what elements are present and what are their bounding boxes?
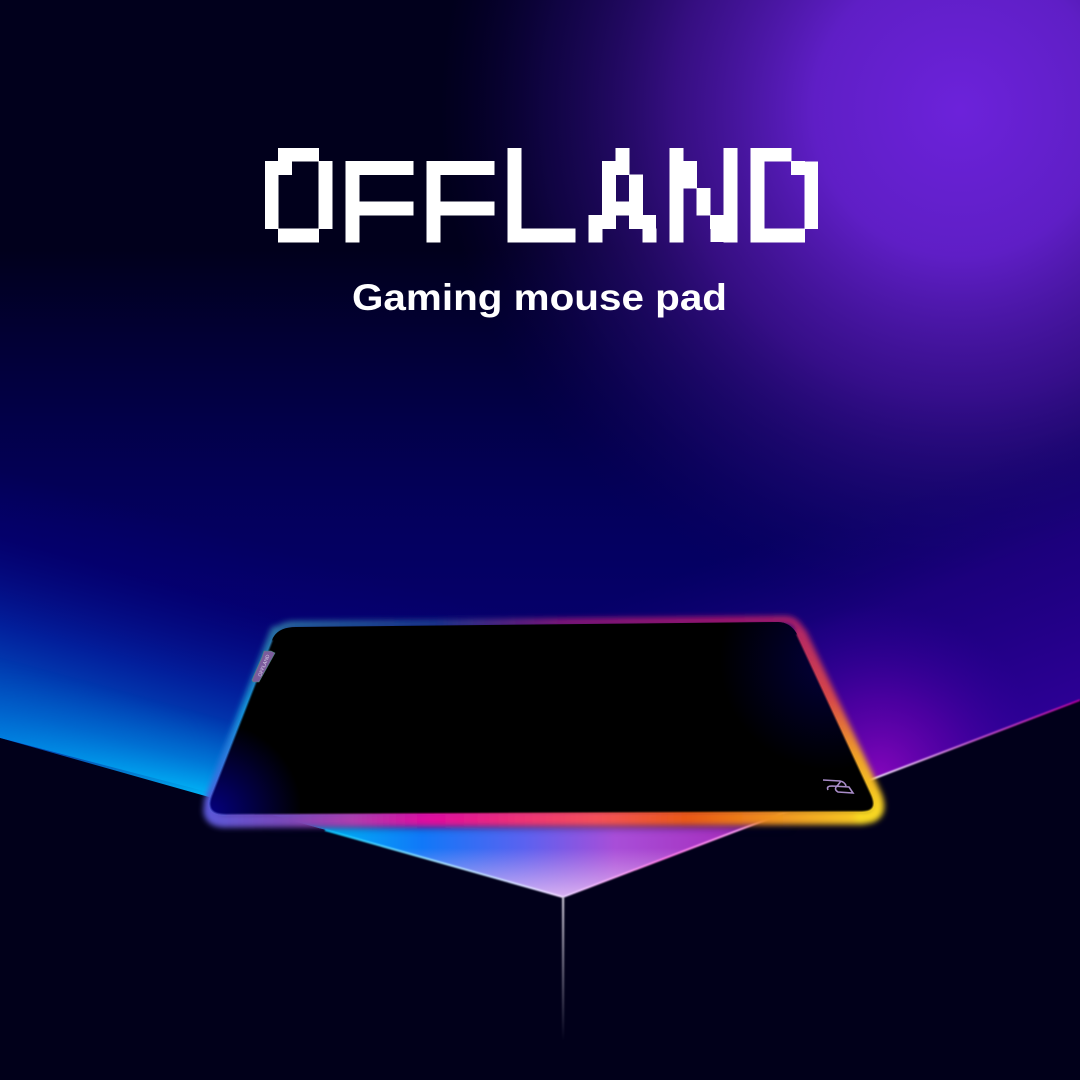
title: N xyxy=(660,126,746,271)
title: F xyxy=(335,129,420,275)
floor light wedge under pad xyxy=(273,815,778,897)
title: L xyxy=(496,126,583,271)
pad shadow on floor xyxy=(270,816,790,828)
title: F xyxy=(416,129,501,275)
cube edge highlights xyxy=(325,700,1080,1047)
title: O xyxy=(260,125,339,271)
pad bright edge xyxy=(209,634,874,815)
pad RGB glow xyxy=(210,620,877,820)
title xyxy=(260,125,824,275)
icon: pad logo xyxy=(823,780,853,793)
pad surface xyxy=(209,622,874,815)
pad side tag: OFFLAND xyxy=(257,654,272,678)
pad side tag xyxy=(252,651,275,682)
subtitle: Gaming mouse pad xyxy=(352,277,727,318)
dark lower cube faces xyxy=(0,700,1080,1080)
mouse pad xyxy=(190,610,890,830)
title: A xyxy=(587,126,656,271)
title: D xyxy=(741,125,824,271)
